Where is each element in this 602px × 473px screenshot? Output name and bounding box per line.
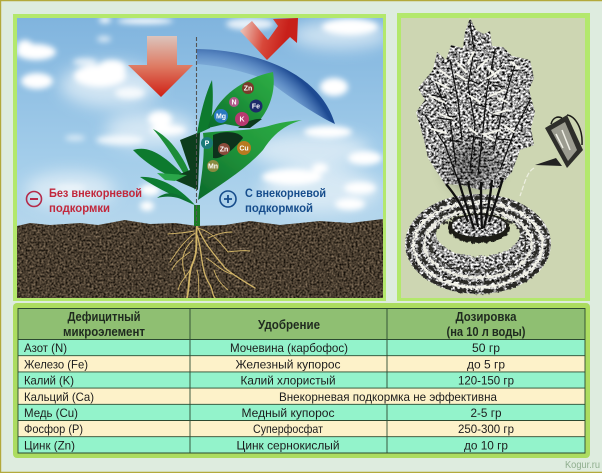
- panel: shrub drawing: [397, 13, 590, 301]
- column: elements: Медь (Cu): [24, 406, 78, 420]
- column: doses: 120-150 гр: [458, 374, 514, 388]
- foliage shading: [446, 141, 498, 189]
- column: elements: Фосфор (P): [24, 422, 83, 436]
- nutrient circles: Mg: [216, 114, 226, 120]
- water stream: [520, 168, 534, 196]
- column: elements: Калий (K): [24, 374, 74, 388]
- label: without foliar feeding: подкормки: [49, 201, 110, 215]
- column: fertilizers: Железный купорос: [236, 357, 340, 371]
- column: doses: [458, 341, 514, 452]
- nutrient circles: Cu: [239, 146, 249, 152]
- panel: table: [13, 303, 590, 458]
- watermark: Kogur.ru: [565, 460, 600, 471]
- panel border: [397, 13, 590, 301]
- clouds: [16, 17, 382, 211]
- table header text: Дефицитный: [68, 310, 140, 324]
- header row: [18, 308, 585, 340]
- table header text: микроэлемент: [63, 325, 145, 339]
- nutrient circles: Fe: [252, 104, 260, 110]
- column: doses: 2-5 гр: [470, 406, 502, 420]
- soil: [17, 219, 383, 298]
- dark patches: [213, 132, 243, 158]
- nutrient circles: Zn: [220, 146, 228, 154]
- column: elements: Кальций (Ca): [24, 390, 94, 404]
- leaf: upper: [208, 72, 274, 128]
- column: doses: 250-300 гр: [458, 422, 514, 436]
- leaf: lower left: [140, 177, 195, 205]
- label: without foliar feeding: [26, 186, 142, 215]
- nutrient circles: Zn: [244, 86, 252, 92]
- shrub foliage: [416, 18, 535, 190]
- soil rings: [408, 198, 548, 292]
- soil ring band: [405, 194, 551, 294]
- stem: [194, 205, 200, 226]
- column: fertilizers: Калий хлористый: [240, 374, 336, 388]
- plant: [133, 72, 302, 226]
- label: with foliar feeding: С внекорневой: [245, 186, 326, 200]
- label: without foliar feeding: Без внекорневой: [49, 186, 142, 200]
- row stripes: [18, 340, 585, 453]
- nutrient circles: [201, 82, 262, 172]
- column: fertilizers: Мочевина (карбофос): [230, 341, 348, 355]
- leaf: right large: [198, 120, 302, 200]
- roots: [168, 226, 255, 298]
- red arrow down: [128, 36, 193, 97]
- column: fertilizers: Внекорневая подкормка не эффективна: [279, 390, 497, 404]
- column: doses: до 5 гр: [467, 357, 505, 371]
- table header text: Удобрение: [258, 318, 320, 332]
- column: doses: 50 гр: [472, 341, 500, 355]
- nutrient circles: K: [239, 116, 245, 124]
- column: fertilizers: [230, 341, 497, 452]
- column: elements: Азот (N): [24, 341, 67, 355]
- column: doses: до 10 гр: [464, 438, 508, 452]
- nutrient circles: P: [205, 140, 210, 148]
- column: elements: [24, 341, 94, 452]
- blue arc: [197, 49, 335, 124]
- leaf: spike: [197, 80, 213, 134]
- label: with foliar feeding: [220, 186, 326, 215]
- nutrient circles: Mn: [208, 164, 218, 170]
- table grid: [18, 308, 585, 453]
- hazy cloud mass: [25, 21, 390, 212]
- dashed divider: [196, 37, 198, 224]
- table header text: [63, 310, 526, 339]
- foliage strokes: [425, 22, 530, 180]
- trunks: [446, 178, 503, 229]
- table header text: Дозировка: [456, 310, 517, 324]
- label: with foliar feeding: подкормкой: [245, 201, 313, 215]
- leaf: upper left: [153, 129, 195, 190]
- panel: plant illustration: [13, 14, 390, 301]
- sky: [17, 18, 383, 226]
- centre mound: [448, 213, 510, 243]
- nutrient circles: N: [231, 100, 237, 106]
- column: fertilizers: Цинк сернокислый: [236, 438, 340, 452]
- column: elements: Железо (Fe): [24, 357, 88, 371]
- watering can: [520, 115, 583, 196]
- panel border: [13, 14, 386, 301]
- column: fertilizers: Суперфосфат: [253, 422, 323, 436]
- dark centre: [176, 132, 200, 190]
- column: elements: Цинк (Zn): [24, 438, 75, 452]
- table header text: (на 10 л воды): [446, 325, 526, 339]
- table backdrop: [13, 303, 590, 458]
- red arrow up: [240, 18, 298, 60]
- column: fertilizers: Медный купорос: [242, 406, 334, 420]
- panel fill: [401, 18, 585, 298]
- leaf: far left: [133, 148, 182, 174]
